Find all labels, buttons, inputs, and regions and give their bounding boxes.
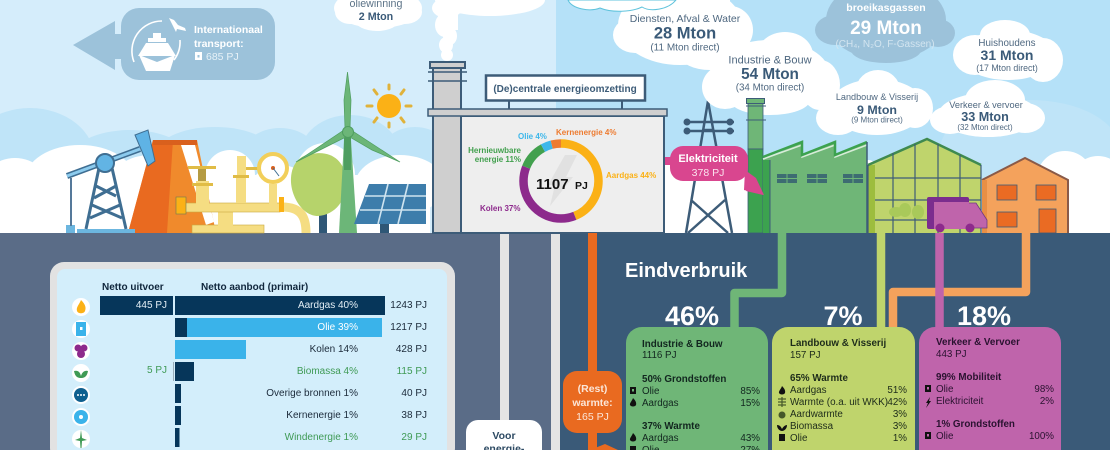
cloud: verkeer en vervoer: (32 Mton direct) [957, 123, 1013, 132]
cloud: landbouw en visserij: 9 Mton [857, 103, 897, 117]
label: international transport: 685 PJ [206, 51, 239, 63]
voor energiegebruik box: Voor [492, 430, 516, 442]
text: landbouw en visserij: 51% [887, 385, 907, 396]
text: industrie en bouw [630, 339, 760, 450]
text: verkeer en vervoer: 98% [1034, 384, 1054, 395]
icon: ship and plane [132, 18, 186, 71]
text: industrie en bouw: 15% [740, 398, 760, 409]
text: landbouw en visserij: 3% [893, 409, 907, 420]
text: verkeer en vervoer: 2% [1040, 396, 1054, 407]
donut chart: energy mix: Kolen 37% [480, 204, 520, 213]
text: verkeer en vervoer: Olie [936, 384, 954, 395]
cloud: oliewinning [334, 0, 422, 31]
cloud: industrie en bouw [702, 32, 840, 115]
bar labels: 445 PJ [136, 300, 167, 311]
label: international transport [194, 24, 263, 63]
cloud: huishoudens: Huishoudens [978, 38, 1036, 49]
text: verkeer en vervoer: Elektriciteit [936, 396, 984, 407]
text: landbouw en visserij: Biomassa [790, 421, 834, 432]
text: landbouw en visserij: 42% [887, 397, 907, 408]
bar labels: 1243 PJ [390, 300, 427, 311]
text: landbouw en visserij: Warmte (o.a. uit WKK) [790, 397, 888, 408]
panel: verkeer en vervoer [919, 327, 1061, 450]
donut chart: energy mix: Olie 4% [518, 132, 547, 141]
bar labels: Biomassa 4% [297, 366, 358, 377]
text: verkeer en vervoer: 99% Mobiliteit [936, 372, 1002, 383]
wind turbine [296, 72, 400, 233]
cloud: verkeer en vervoer [930, 80, 1045, 137]
donut chart: energy mix: Hernieuwbare [468, 146, 522, 155]
bar labels: 1217 PJ [390, 322, 427, 333]
cloud: broeikasgassen [815, 0, 955, 63]
gas pipeline and gauge [176, 154, 306, 233]
residual heat connector and callout [563, 233, 622, 450]
bar labels: 115 PJ [397, 366, 427, 377]
percentage labels: 46% [665, 301, 719, 331]
cloud: top outlined [568, 0, 676, 11]
panel: industrie en bouw [626, 327, 768, 450]
greenhouse [868, 139, 981, 233]
bar labels: 5 PJ [147, 365, 167, 376]
text: industrie en bouw: Olie [642, 386, 660, 397]
residual heat connector and callout: warmte: [571, 397, 613, 409]
text: industrie en bouw: Industrie & Bouw [642, 339, 723, 350]
cloud: industrie en bouw: 54 Mton [741, 66, 799, 83]
international transport callout [73, 8, 275, 80]
donut chart: energy mix: 1107 [536, 176, 569, 193]
text: landbouw en visserij: 65% Warmte [790, 373, 848, 384]
cloud: diensten, afval en water [613, 0, 753, 70]
bar labels: Olie 39% [317, 322, 358, 333]
donut chart: energy mix: Aardgas 44% [606, 171, 656, 180]
donut chart: energy mix: energie 11% [475, 155, 521, 164]
cloud: huishoudens [953, 20, 1063, 82]
residual heat connector and callout: 165 PJ [576, 411, 609, 423]
sign: (De)centrale energieomzetting [486, 76, 645, 100]
panel: landbouw en visserij [772, 327, 915, 450]
text: industrie en bouw: 85% [740, 386, 760, 397]
electricity callout: Elektriciteit [678, 153, 738, 165]
bar labels: 428 PJ [396, 344, 427, 355]
residual heat connector and callout: (Rest) [578, 383, 607, 395]
cloud: broeikasgassen: broeikasgassen [846, 2, 926, 14]
label: international transport: transport: [194, 38, 244, 50]
bar labels: Aardgas 40% [298, 300, 358, 311]
text: industrie en bouw: 50% Grondstoffen [642, 374, 726, 385]
cloud: verkeer en vervoer: 33 Mton [961, 110, 1009, 124]
text: landbouw en visserij: Aardwarmte [790, 409, 843, 420]
bar labels: Kolen 14% [310, 344, 358, 355]
cloud: diensten, afval en water: (11 Mton direct) [650, 42, 720, 54]
percentage labels: 18% [957, 301, 1011, 331]
text: industrie en bouw: 37% Warmte [642, 421, 700, 432]
text: verkeer en vervoer [925, 337, 1054, 442]
text: landbouw en visserij: Aardgas [790, 385, 827, 396]
heading: Eindverbruik: Eindverbruik [625, 260, 748, 282]
ground [0, 233, 1110, 450]
green chimney [746, 98, 766, 233]
bar labels: Kernenergie 1% [286, 410, 358, 421]
cloud: huishoudens: (17 Mton direct) [976, 63, 1038, 73]
percentage labels: 7% [823, 301, 863, 331]
text: verkeer en vervoer: Verkeer & Vervoer [936, 337, 1020, 348]
bar labels [136, 300, 427, 443]
donut chart: energy mix: PJ [575, 180, 588, 192]
text: verkeer en vervoer: 100% [1029, 431, 1054, 442]
cloud: landbouw en visserij: (9 Mton direct) [851, 116, 903, 124]
column headers: Netto aanbod (primair) [201, 282, 308, 293]
text: landbouw en visserij: Olie [790, 433, 808, 444]
donut chart: energy mix [468, 128, 656, 218]
delivery truck [927, 197, 987, 232]
electricity callout: 378 PJ [692, 167, 724, 179]
factory [763, 142, 867, 233]
donut chart: energy mix: Kernenergie 4% [556, 128, 616, 137]
text: landbouw en visserij: Landbouw & Visserij [790, 338, 886, 349]
oil pump [66, 130, 155, 233]
cloud: landbouw en visserij [816, 70, 933, 135]
text: verkeer en vervoer: 443 PJ [936, 349, 967, 360]
cloud: industrie en bouw: (34 Mton direct) [736, 82, 804, 94]
source icons [72, 298, 90, 448]
text: landbouw en visserij [777, 338, 907, 444]
text: landbouw en visserij: 3% [893, 421, 907, 432]
bar labels: Windenergie 1% [285, 432, 358, 443]
cloud: diensten, afval en water: 28 Mton [654, 24, 716, 42]
percentage labels [665, 301, 1011, 331]
cloud: landbouw en visserij: Landbouw & Visserij [836, 92, 918, 102]
cloud: huishoudens: 31 Mton [981, 47, 1033, 63]
text: industrie en bouw: Aardgas [642, 433, 679, 444]
tree [291, 153, 346, 233]
bars [100, 296, 385, 447]
bar labels: 40 PJ [401, 388, 427, 399]
smoke plume [432, 0, 545, 61]
cloud: industrie en bouw: Industrie & Bouw [728, 54, 812, 66]
supply table panel [50, 262, 455, 450]
label: international transport: Internationaal [194, 24, 263, 36]
text: landbouw en visserij: 1% [893, 433, 907, 444]
power plant building [428, 62, 667, 233]
house [982, 158, 1068, 233]
electricity callout [665, 146, 764, 195]
column headers [102, 282, 308, 293]
bar labels: 29 PJ [401, 432, 427, 443]
column headers: Netto uitvoer [102, 282, 164, 293]
power pylon [684, 101, 734, 233]
cooling tower [128, 140, 216, 233]
cloud: verkeer en vervoer: Verkeer & vervoer [949, 100, 1023, 110]
bar labels: Overige bronnen 1% [266, 388, 358, 399]
text: industrie en bouw: Aardgas [642, 398, 679, 409]
cloud: diensten, afval en water: Diensten, Afval & Water [630, 13, 741, 25]
text: verkeer en vervoer: Olie [936, 431, 954, 442]
sign: (De)centrale energieomzetting: (De)centrale energieomzetting [493, 84, 637, 95]
bar labels: 38 PJ [401, 410, 427, 421]
solar panel [354, 184, 426, 233]
text: industrie en bouw: 43% [740, 433, 760, 444]
text: landbouw en visserij: 157 PJ [790, 350, 821, 361]
cloud: oliewinning: 2 Mton [359, 11, 393, 23]
cloud: broeikasgassen: (CH₄, N₂O, F-Gassen) [835, 39, 935, 50]
sky background [0, 0, 1110, 233]
connector pipes [734, 233, 1026, 328]
text: industrie en bouw: 1116 PJ [642, 350, 677, 361]
icon: sun [367, 85, 411, 127]
text: verkeer en vervoer: 1% Grondstoffen [936, 419, 1015, 430]
voor energiegebruik box [466, 420, 542, 450]
cloud: broeikasgassen: 29 Mton [850, 18, 922, 39]
